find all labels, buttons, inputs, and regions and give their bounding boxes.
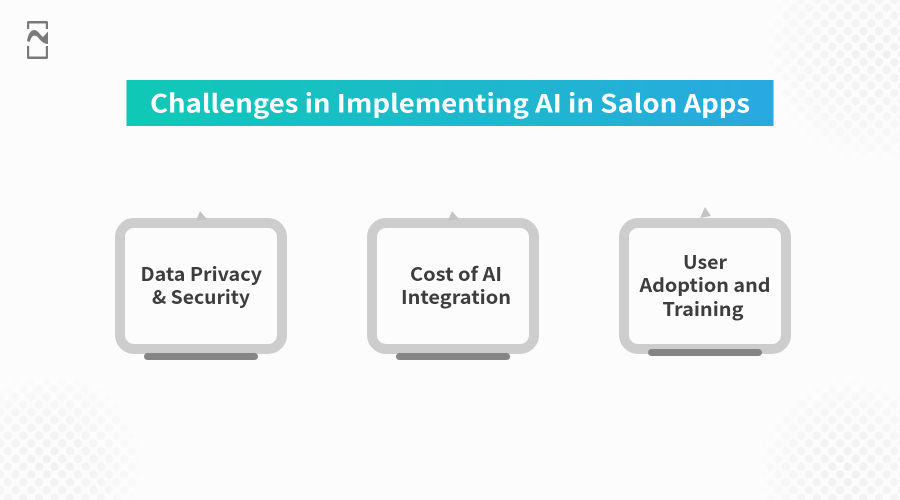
panel text [638,248,770,322]
panel text: Integration [401,283,511,310]
panel text: User [683,248,728,275]
panel text: Adoption and [638,271,770,298]
title banner [126,80,774,126]
panel: cost of AI integration [372,211,534,360]
panel text [140,260,262,310]
panel text [401,260,511,310]
title: Challenges in Implementing AI in Salon Apps [150,84,750,120]
panel: data privacy and security [120,211,282,360]
panel text: Data Privacy [140,260,262,287]
panel text: Cost of AI [410,260,502,287]
panel text: Training [662,295,744,322]
logo [27,21,48,59]
panel: user adoption and training [624,207,786,356]
panel text: & Security [152,283,250,310]
